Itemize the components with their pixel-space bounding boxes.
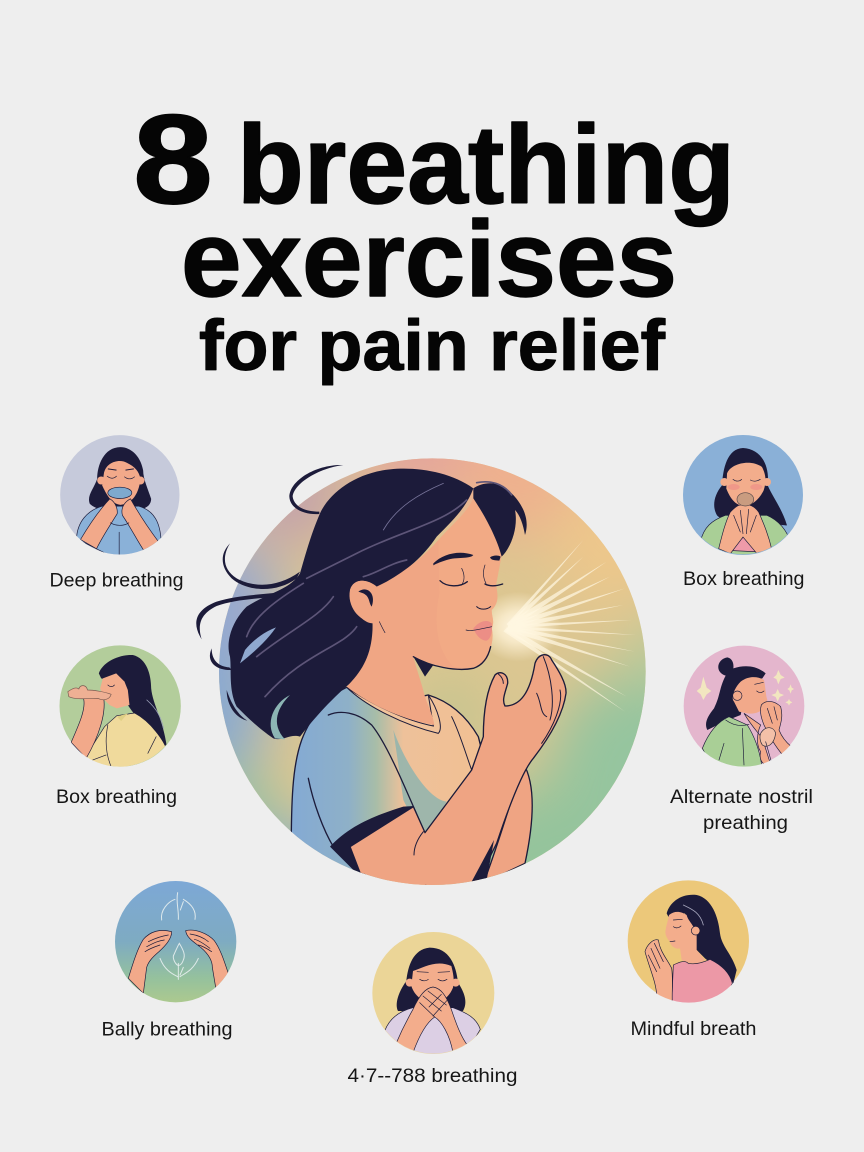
title line: 8 breathing: breathing: [237, 103, 735, 227]
label: alternate nostril breathing: preathing: [703, 812, 788, 834]
label: box breathing left: Box breathing: [56, 786, 177, 808]
label: box breathing right: Box breathing: [683, 568, 804, 590]
breath lines: [160, 893, 198, 979]
icon: belly breathing hands: [115, 881, 236, 1002]
title line: 8 breathing: 8: [133, 88, 213, 230]
sparkles: [697, 670, 794, 706]
label: alternate nostril breathing: Alternate nostril: [670, 786, 813, 808]
face details: brows, eyes, nose, lips: [433, 553, 503, 641]
icon: box breathing left: [60, 645, 181, 769]
forearm and hand: [350, 655, 566, 890]
icon: 4-7-8 breathing: [372, 932, 494, 1056]
shirt: [291, 687, 483, 890]
ear: [349, 581, 377, 622]
title line: for pain relief: for pain relief: [199, 307, 665, 386]
gradient circle: [219, 458, 646, 885]
figure: [229, 469, 566, 890]
right hand: [186, 930, 230, 993]
left hand: [128, 930, 172, 993]
icon: deep breathing: [60, 435, 179, 560]
label: mindful breath: Mindful breath: [630, 1018, 756, 1040]
dark sleeve opening: [330, 806, 414, 878]
hair mass: [229, 469, 473, 739]
title line: exercises: exercises: [181, 198, 677, 319]
gaps between hair strands: [240, 627, 290, 739]
label: belly breathing: Bally breathing: [102, 1018, 232, 1040]
hair highlights: [247, 482, 512, 697]
label: 4-7-8 breathing: 4·7--788 breathing: [348, 1065, 518, 1087]
icon: mindful breath: [628, 880, 749, 1005]
label: deep breathing: Deep breathing: [50, 570, 184, 592]
flying hair wisps outside the circle: [196, 465, 343, 721]
breath light burst: [491, 541, 634, 711]
icon: alternate nostril breathing: [684, 646, 804, 770]
icon: box breathing right: [683, 435, 803, 562]
title: [133, 88, 735, 386]
central illustration: girl breathing out: [196, 458, 646, 885]
label: alternate nostril breathing: [670, 786, 813, 834]
head, neck and face: [347, 498, 502, 725]
side hair lock over forehead: [473, 483, 527, 557]
